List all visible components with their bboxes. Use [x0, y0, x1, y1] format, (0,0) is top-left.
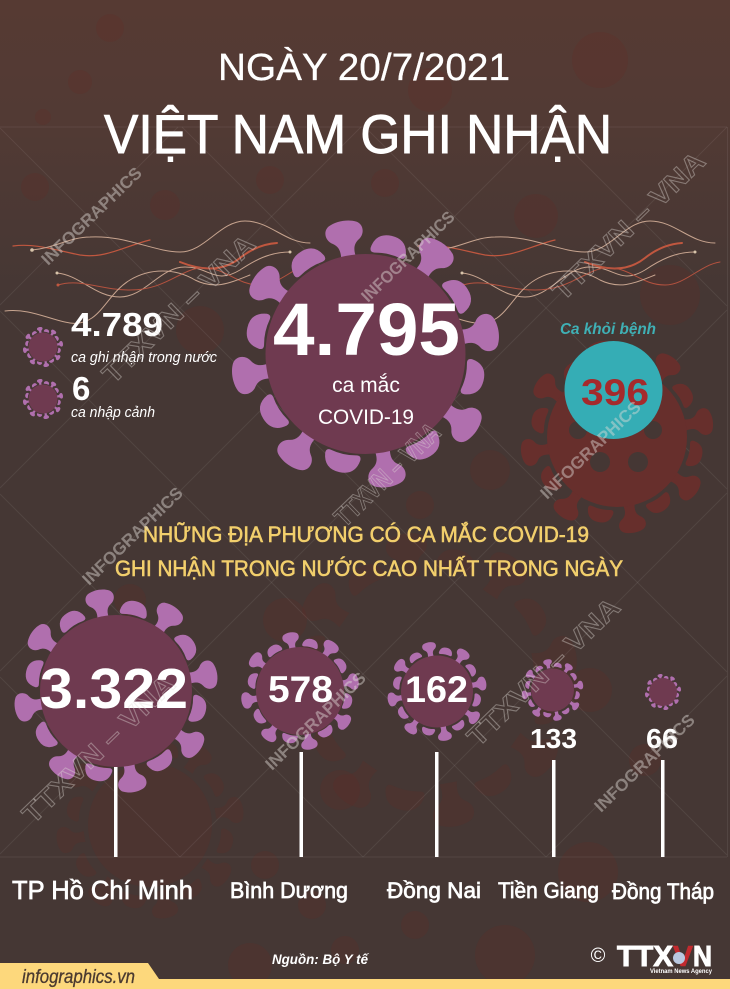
virus: Binh Duong: [240, 631, 360, 751]
section heading: NHỮNG ĐỊA PHƯƠNG CÓ CA MẮC COVID-19: [143, 522, 589, 547]
icon: main virus: [229, 218, 502, 490]
city labels: Đồng Tháp: [612, 879, 714, 904]
stat: total cases: 4.795: [273, 288, 460, 371]
decorative waves left: [5, 221, 315, 323]
stat: imported cases: ca nhập cảnh: [71, 404, 155, 421]
section heading: [115, 522, 623, 581]
virus: Dong Thap: [645, 674, 681, 710]
stat: total cases: ca mắc: [332, 374, 400, 397]
watermarks: TTXVN – VNA: [96, 229, 261, 389]
city labels: TP Hồ Chí Minh: [12, 875, 193, 905]
icon: dark red recovered virus: [519, 339, 715, 535]
stat: total cases: COVID-19: [318, 406, 414, 429]
watermarks: TTXVN – VNA: [328, 417, 446, 532]
stick: Binh Duong: [300, 752, 303, 857]
icon: small virus imported: [23, 379, 63, 419]
city labels: Bình Dương: [230, 878, 348, 903]
logo TTXVN: TTX: [617, 941, 674, 973]
stat: domestic cases: ca ghi nhận trong nước: [71, 349, 217, 366]
logo TTXVN: V: [673, 941, 694, 973]
watermarks: INFOGRAPHICS: [262, 669, 370, 774]
logo TTXVN: ©: [591, 945, 606, 967]
stat: total cases: [273, 288, 460, 429]
icon: small virus domestic: [23, 327, 63, 367]
watermarks: INFOGRAPHICS: [358, 207, 459, 306]
watermarks: INFOGRAPHICS: [591, 711, 699, 816]
stat: domestic cases: 4.789: [71, 306, 163, 343]
watermarks: [16, 146, 711, 829]
number: 3.322: 3.322: [40, 657, 188, 721]
source: Nguồn: Bộ Y tế: [272, 951, 369, 967]
virus: TP Ho Chi Minh: [12, 587, 220, 795]
watermarks: INFOGRAPHICS: [537, 398, 645, 503]
background diagonal guide lines: [0, 127, 728, 857]
decorative waves right: [410, 221, 720, 323]
stat: imported cases: 6: [72, 370, 90, 407]
logo TTXVN: [591, 941, 712, 975]
stick: TP Ho Chi Minh: [114, 767, 118, 857]
number: 133: 133: [530, 723, 577, 754]
watermarks: INFOGRAPHICS: [38, 164, 146, 269]
city labels: [12, 875, 714, 905]
number: 578: 578: [268, 669, 333, 710]
title date: NGÀY 20/7/2021: [218, 46, 510, 89]
watermarks: TTXVN – VNA: [461, 592, 626, 752]
stat: domestic cases: [71, 306, 217, 366]
label: recovered: Ca khỏi bệnh: [560, 321, 656, 338]
watermarks: TTXVN – VNA: [546, 146, 711, 306]
virus: Tien Giang: [521, 659, 584, 721]
logo TTXVN: N: [693, 941, 712, 973]
number: 162: 162: [405, 669, 468, 710]
watermarks: TTXVN – VNA: [16, 669, 181, 829]
stick: Dong Nai: [435, 752, 438, 857]
logo TTXVN: Vietnam News Agency: [650, 968, 712, 975]
virus: Dong Nai: [387, 641, 487, 742]
stick: Dong Thap: [661, 760, 664, 857]
footer band: [0, 963, 730, 989]
stat: recovered count: 396: [581, 372, 649, 413]
city labels: Đồng Nai: [387, 878, 481, 903]
title main: VIỆT NAM GHI NHẬN: [104, 103, 612, 165]
watermarks: INFOGRAPHICS: [79, 484, 187, 589]
city labels: Tiền Giang: [498, 878, 599, 903]
number: 66: 66: [646, 723, 678, 754]
stat: imported cases: [71, 370, 155, 421]
stat: recovered count: [564, 341, 662, 439]
section heading: GHI NHẬN TRONG NƯỚC CAO NHẤT TRONG NGÀY: [115, 556, 623, 581]
footer url: infographics.vn: [22, 967, 135, 988]
stick: Tien Giang: [552, 760, 556, 857]
